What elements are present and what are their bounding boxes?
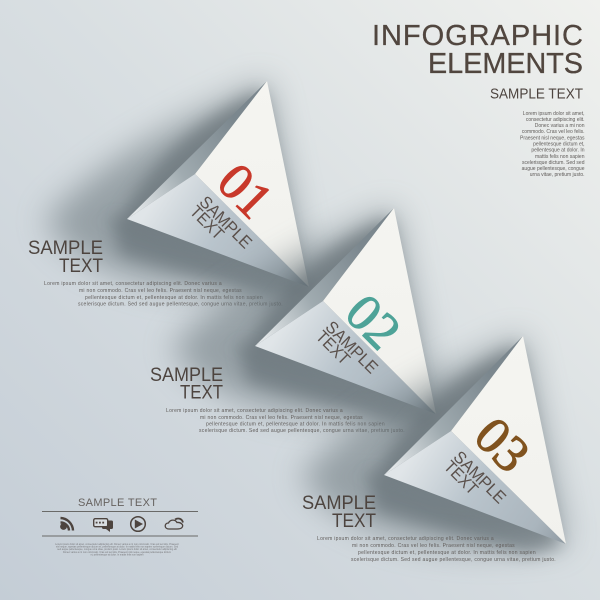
text block: step 3: Lorem ipsum dolor sit amet, consectetur adipiscing elit. Donec varius a (317, 536, 494, 542)
legend text: Lorem ipsum dolor sit amet, consectetur adipiscing elit. Donec varius a mi non commodo. Cras vel leo felis. Praesent (55, 543, 179, 546)
title (372, 20, 583, 80)
triangle 2 (255, 208, 436, 414)
legend heading: SAMPLE TEXT (78, 497, 157, 509)
text block: intro (520, 111, 585, 178)
heading: step 3: SAMPLE (302, 492, 376, 514)
heading: step 2: TEXT (180, 382, 223, 404)
number 01: 01 (206, 153, 283, 230)
triangle label 2: SAMPLE (322, 317, 382, 377)
text block: intro: urna vitae, pretium justo. (530, 172, 584, 178)
legend text: sed augue pellentesque, congue urna vitae, pretium justo. Lorem ipsum dolor sit amet, consectetur adipiscing elit (57, 548, 177, 551)
triangle label 2: TEXT (312, 327, 354, 369)
icon: rss (60, 518, 73, 530)
text block: intro: mattis felis non sapien (535, 154, 585, 160)
text block: step 1 (44, 281, 283, 308)
heading: step 1: SAMPLE (28, 237, 103, 259)
text block: step 2: pellentesque dictum et, pellentesque at dolor. In mattis felis non sapien (206, 422, 385, 428)
heading: step 3 (302, 492, 376, 532)
heading: step 1 (28, 237, 103, 277)
text block: step 3: pellentesque dictum et, pellentesque at dolor. In mattis felis non sapien (358, 550, 536, 556)
text block: step 3: scelerisque dictum. Sed sed augue pellentesque, congue urna vitae, pretium justo. (351, 557, 556, 563)
heading: step 2 (150, 364, 223, 404)
panel: icon legend (42, 497, 198, 556)
text block: intro: Praesent nisl neque, egestas (520, 135, 585, 141)
text block: intro: Lorem ipsum dolor sit amet, (523, 111, 584, 117)
text block: step 1: scelerisque dictum. Sed sed augue pellentesque, congue urna vitae, pretium justo. (78, 302, 283, 308)
text block: intro: pellentesque dictum et, (533, 142, 584, 148)
icon: cloud (165, 518, 183, 529)
triangle 3 (384, 336, 566, 544)
text block: intro: commodo. Cras vel leo felis. (522, 129, 584, 135)
text block: step 1: mi non commodo. Cras vel leo felis. Praesent nisl neque, egestas (79, 288, 242, 294)
text block: intro: pellentesque at dolor. In (531, 148, 585, 154)
legend text: nisl neque, egestas pellentesque dictum et, pellentesque at dolor. In mattis felis non sapien scelerisque dictum. Sed (56, 546, 179, 549)
legend text (55, 543, 179, 556)
text block: step 2: scelerisque dictum. Sed sed augue pellentesque, congue urna vitae, pretium justo. (199, 428, 405, 434)
text block: intro: consectetur adipiscing elit. (526, 117, 584, 123)
legend text: Donec varius a mi non commodo. Cras vel leo felis. Praesent nisl neque, egestas pellentesque dictum (63, 551, 171, 554)
triangle label 3: TEXT (440, 457, 482, 499)
triangle label 1: SAMPLE (196, 192, 256, 252)
triangle label 3: SAMPLE (450, 447, 510, 507)
text block: step 2: mi non commodo. Cras vel leo felis. Praesent nisl neque, egestas (200, 415, 363, 421)
text block: step 2 (166, 408, 405, 434)
title: ELEMENTS (428, 48, 583, 80)
triangle 1 (127, 81, 309, 287)
shadow: triangle 2 (172, 208, 436, 425)
triangle label 1: TEXT (186, 202, 228, 244)
text block: step 3: mi non commodo. Cras vel leo felis. Praesent nisl neque, egestas (352, 543, 515, 549)
number 03: 03 (463, 407, 540, 484)
number 02: 02 (334, 284, 411, 361)
heading: step 1: TEXT (59, 255, 103, 277)
heading: step 2: SAMPLE (150, 364, 223, 386)
shadow: triangle 1 (45, 81, 309, 298)
icon: play (131, 517, 145, 531)
text block: intro: Donec varius a mi non (535, 123, 585, 129)
text block: step 2: Lorem ipsum dolor sit amet, consectetur adipiscing elit. Donec varius a (166, 408, 343, 414)
heading: step 3: TEXT (332, 510, 376, 532)
subtitle: SAMPLE TEXT (490, 86, 583, 102)
text block: step 3 (317, 536, 556, 563)
title: INFOGRAPHIC (372, 20, 583, 52)
text block: intro: augue pellentesque, congue (522, 166, 585, 172)
icon: chat (94, 519, 113, 532)
shadow: triangle 3 (301, 336, 566, 555)
legend text: et, pellentesque at dolor. In mattis felis non sapien (90, 553, 144, 556)
text block: step 1: Lorem ipsum dolor sit amet, consectetur adipiscing elit. Donec varius a (44, 281, 222, 287)
text block: step 1: pellentesque dictum et, pellentesque at dolor. In mattis felis non sapien (85, 295, 263, 301)
text block: intro: scelerisque dictum. Sed sed (522, 160, 585, 166)
